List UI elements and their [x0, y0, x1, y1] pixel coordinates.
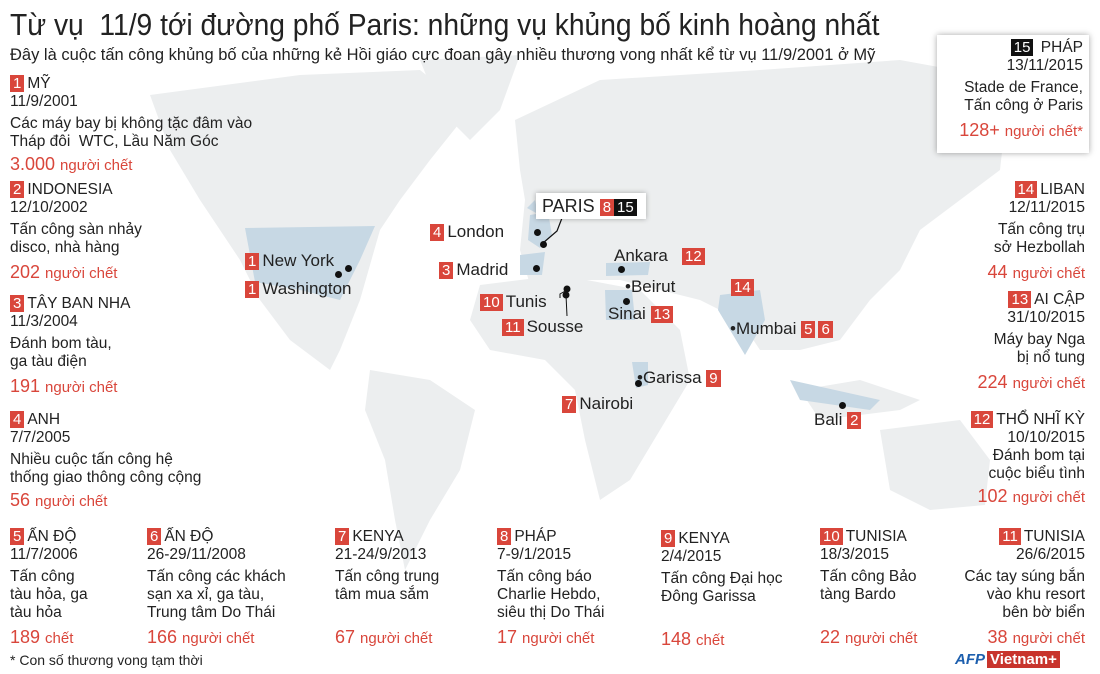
item 14: 12/11/2015	[1009, 199, 1085, 216]
item 14: sở Hezbollah	[994, 239, 1085, 256]
item 13: 13	[1011, 291, 1028, 308]
bottom item 6	[147, 527, 286, 647]
item 14: 14	[1018, 181, 1034, 198]
item 15 box: 13/11/2015	[1007, 57, 1083, 74]
label: Nairobi: 7	[565, 396, 573, 413]
bottom item 9: KENYA	[678, 530, 730, 547]
item 4: 56 người chết	[10, 490, 107, 510]
item 12: 12	[974, 411, 990, 428]
item 13: AI CẬP	[1034, 291, 1085, 308]
label: London: London	[447, 222, 504, 241]
label: Garissa: 9	[709, 370, 718, 387]
bottom item 9	[661, 530, 782, 649]
label: New York: 1	[248, 253, 256, 270]
item 1	[10, 74, 252, 174]
bottom item 5: 11/7/2006	[10, 546, 78, 563]
bottom item 9: 9	[664, 530, 672, 547]
bottom item 11: 11	[1002, 528, 1018, 545]
bottom item 9: 2/4/2015	[661, 548, 721, 565]
bottom item 8: Tấn công báo	[497, 568, 592, 585]
bottom item 7: 7	[338, 528, 346, 545]
item 2: 202 người chết	[10, 262, 117, 282]
label: Tunis: Tunis	[506, 292, 547, 311]
item 14: Tấn công trụ	[998, 221, 1085, 238]
item 12: 10/10/2015	[1007, 429, 1085, 446]
label: Mumbai: 6	[821, 321, 830, 338]
item 2: 2	[13, 181, 21, 198]
bottom item 5	[10, 527, 88, 647]
item 2: INDONESIA	[27, 181, 113, 198]
item 3	[10, 294, 130, 396]
label: Washington: Washington	[262, 279, 352, 298]
item 12: cuộc biểu tình	[988, 465, 1085, 482]
bottom item 7: Tấn công trung	[335, 568, 439, 585]
label: Sousse	[502, 317, 583, 336]
item 1: 3.000 người chết	[10, 154, 132, 174]
item 4	[10, 411, 201, 510]
item 4: Nhiều cuộc tấn công hệ	[10, 451, 173, 468]
item 15 box: Tấn công ở Paris	[964, 97, 1083, 114]
item 1: Các máy bay bị không tặc đâm vào	[10, 115, 252, 132]
bottom item 11: 38 người chết	[988, 627, 1085, 647]
item 15 box: PHÁP	[1041, 39, 1083, 56]
item 2: Tấn công sàn nhảy	[10, 221, 142, 238]
item 13: Máy bay Nga	[994, 331, 1085, 348]
item 4: ANH	[27, 411, 60, 428]
Paris callout: PARIS	[542, 196, 595, 216]
item 4: thống giao thông công cộng	[10, 469, 201, 486]
item 15 box: Stade de France,	[964, 79, 1083, 96]
label: Ankara: Ankara	[614, 246, 668, 265]
logo: AFP Vietnam+	[955, 651, 1057, 668]
Paris callout: 15	[617, 199, 634, 216]
label: Sousse: Sousse	[527, 317, 583, 336]
bottom item 10: Tấn công Bảo	[820, 568, 917, 585]
item 3: TÂY BAN NHA	[27, 295, 130, 312]
label: Washington: 1	[248, 281, 256, 298]
item 3: Đánh bom tàu,	[10, 335, 112, 352]
item 15 box: 15	[1014, 39, 1030, 56]
bottom item 9: Đông Garissa	[661, 588, 756, 605]
bottom item 6: Trung tâm Do Thái	[147, 604, 275, 621]
bottom item 10: TUNISIA	[846, 528, 907, 545]
bottom item 8: 8	[500, 528, 508, 545]
item 13: 224 người chết	[978, 372, 1085, 392]
bottom item 7: 21-24/9/2013	[335, 546, 426, 563]
item 2: 12/10/2002	[10, 199, 88, 216]
item 13: bị nổ tung	[1017, 349, 1085, 366]
item 13	[978, 290, 1085, 392]
label: Bali	[814, 410, 861, 429]
item 2	[10, 181, 142, 282]
bottom item 10: 18/3/2015	[820, 546, 889, 563]
label: Garissa: •Garissa	[637, 368, 702, 387]
label: Sinai: 13	[654, 306, 670, 323]
bottom item 11: bên bờ biển	[1002, 604, 1085, 621]
title: Từ vụ 11/9 tới đường phố Paris: những vụ khủng bố kinh hoàng nhất	[10, 7, 879, 42]
item 14: LIBAN	[1040, 181, 1085, 198]
item 3: 191 người chết	[10, 376, 117, 396]
label: Beirut: •Beirut	[625, 277, 675, 296]
bottom item 7	[335, 528, 439, 647]
bottom item 6: 6	[150, 528, 158, 545]
bottom item 8	[497, 527, 604, 647]
label: Bali: Bali	[814, 410, 842, 429]
bottom item 9: 148 chết	[661, 629, 724, 649]
bottom item 7: tâm mua sắm	[335, 586, 429, 603]
label: Tunis: 10	[483, 294, 500, 311]
label: Ankara	[614, 246, 705, 265]
item 3: ga tàu điện	[10, 353, 87, 370]
label: Madrid: Madrid	[456, 260, 508, 279]
item 15 box: 128+ người chết*	[959, 120, 1083, 140]
item 12: 102 người chết	[978, 486, 1085, 506]
bottom item 10: tàng Bardo	[820, 586, 896, 603]
item 1: 1	[13, 75, 21, 92]
bottom item 6: 26-29/11/2008	[147, 546, 246, 563]
bottom item 10: 22 người chết	[820, 627, 917, 647]
label: Ankara: 12	[685, 248, 702, 265]
bottom item 7: 67 người chết	[335, 627, 432, 647]
item 4: 7/7/2005	[10, 429, 70, 446]
bottom item 10: 10	[823, 528, 840, 545]
bottom item 8: PHÁP	[514, 528, 557, 545]
item 12	[971, 410, 1085, 506]
bottom item 8: Charlie Hebdo,	[497, 586, 600, 603]
label: Nairobi: Nairobi	[579, 394, 633, 413]
item 14: 44 người chết	[988, 262, 1085, 282]
bottom item 5: tàu hỏa, ga	[10, 586, 88, 603]
bottom item 9: Tấn công Đại học	[661, 570, 782, 587]
label: Madrid: 3	[442, 262, 450, 279]
label: London: 4	[433, 224, 441, 241]
bottom item 5: tàu hỏa	[10, 604, 62, 621]
bottom item 5: ẤN ĐỘ	[27, 528, 76, 545]
label: New York: New York	[262, 251, 334, 270]
bottom item 5: 189 chết	[10, 627, 73, 647]
label: Mumbai: •Mumbai	[730, 319, 796, 338]
bottom item 11: Các tay súng bắn	[964, 568, 1085, 585]
bottom item 10	[820, 528, 918, 647]
subtitle: Đây là cuộc tấn công khủng bố của những kẻ Hồi giáo cực đoan gây nhiều thương vong nhất kể từ vụ 11/9/2001 ở Mỹ	[10, 46, 875, 64]
item 15 box	[937, 35, 1089, 153]
label: 14: 14	[734, 279, 751, 296]
bottom item 6: 166 người chết	[147, 627, 254, 647]
label: Sinai	[608, 304, 673, 323]
label: Mumbai: 5	[804, 321, 812, 338]
bottom item 7: KENYA	[352, 528, 404, 545]
label: Sousse: 11	[505, 319, 521, 336]
map labels: USA	[245, 251, 352, 298]
bottom item 11: vào khu resort	[987, 586, 1085, 603]
item 12: Đánh bom tại	[993, 447, 1085, 464]
item 3: 11/3/2004	[10, 313, 78, 330]
item 1: 11/9/2001	[10, 93, 78, 110]
bottom item 5: 5	[13, 528, 21, 545]
bottom item 8: siêu thị Do Thái	[497, 604, 604, 621]
Paris callout	[533, 190, 649, 242]
item 4: 4	[13, 411, 21, 428]
bottom item 6: ẤN ĐỘ	[164, 528, 213, 545]
item 1: MỸ	[27, 75, 51, 92]
bottom item 11: TUNISIA	[1024, 528, 1085, 545]
item 2: disco, nhà hàng	[10, 239, 119, 256]
Paris callout: 8	[603, 199, 611, 216]
label: Tunis	[480, 292, 547, 311]
footnote: * Con số thương vong tạm thời	[10, 652, 203, 668]
bottom item 11	[964, 528, 1085, 647]
item 1: Tháp đôi WTC, Lầu Năm Góc	[10, 133, 218, 150]
bottom item 8: 17 người chết	[497, 627, 594, 647]
item 12: THỔ NHĨ KỲ	[996, 411, 1085, 428]
label: Sinai: Sinai	[608, 304, 646, 323]
item 13: 31/10/2015	[1007, 309, 1085, 326]
bottom item 6: Tấn công các khách	[147, 568, 286, 585]
label: Mumbai	[730, 319, 833, 338]
item 3: 3	[13, 295, 21, 312]
bottom item 6: sạn xa xỉ, ga tàu,	[147, 586, 264, 603]
bottom item 5: Tấn công	[10, 568, 75, 585]
label: Bali: 2	[850, 412, 858, 429]
item 14	[988, 181, 1085, 282]
bottom item 11: 26/6/2015	[1016, 546, 1085, 563]
bottom item 8: 7-9/1/2015	[497, 546, 571, 563]
